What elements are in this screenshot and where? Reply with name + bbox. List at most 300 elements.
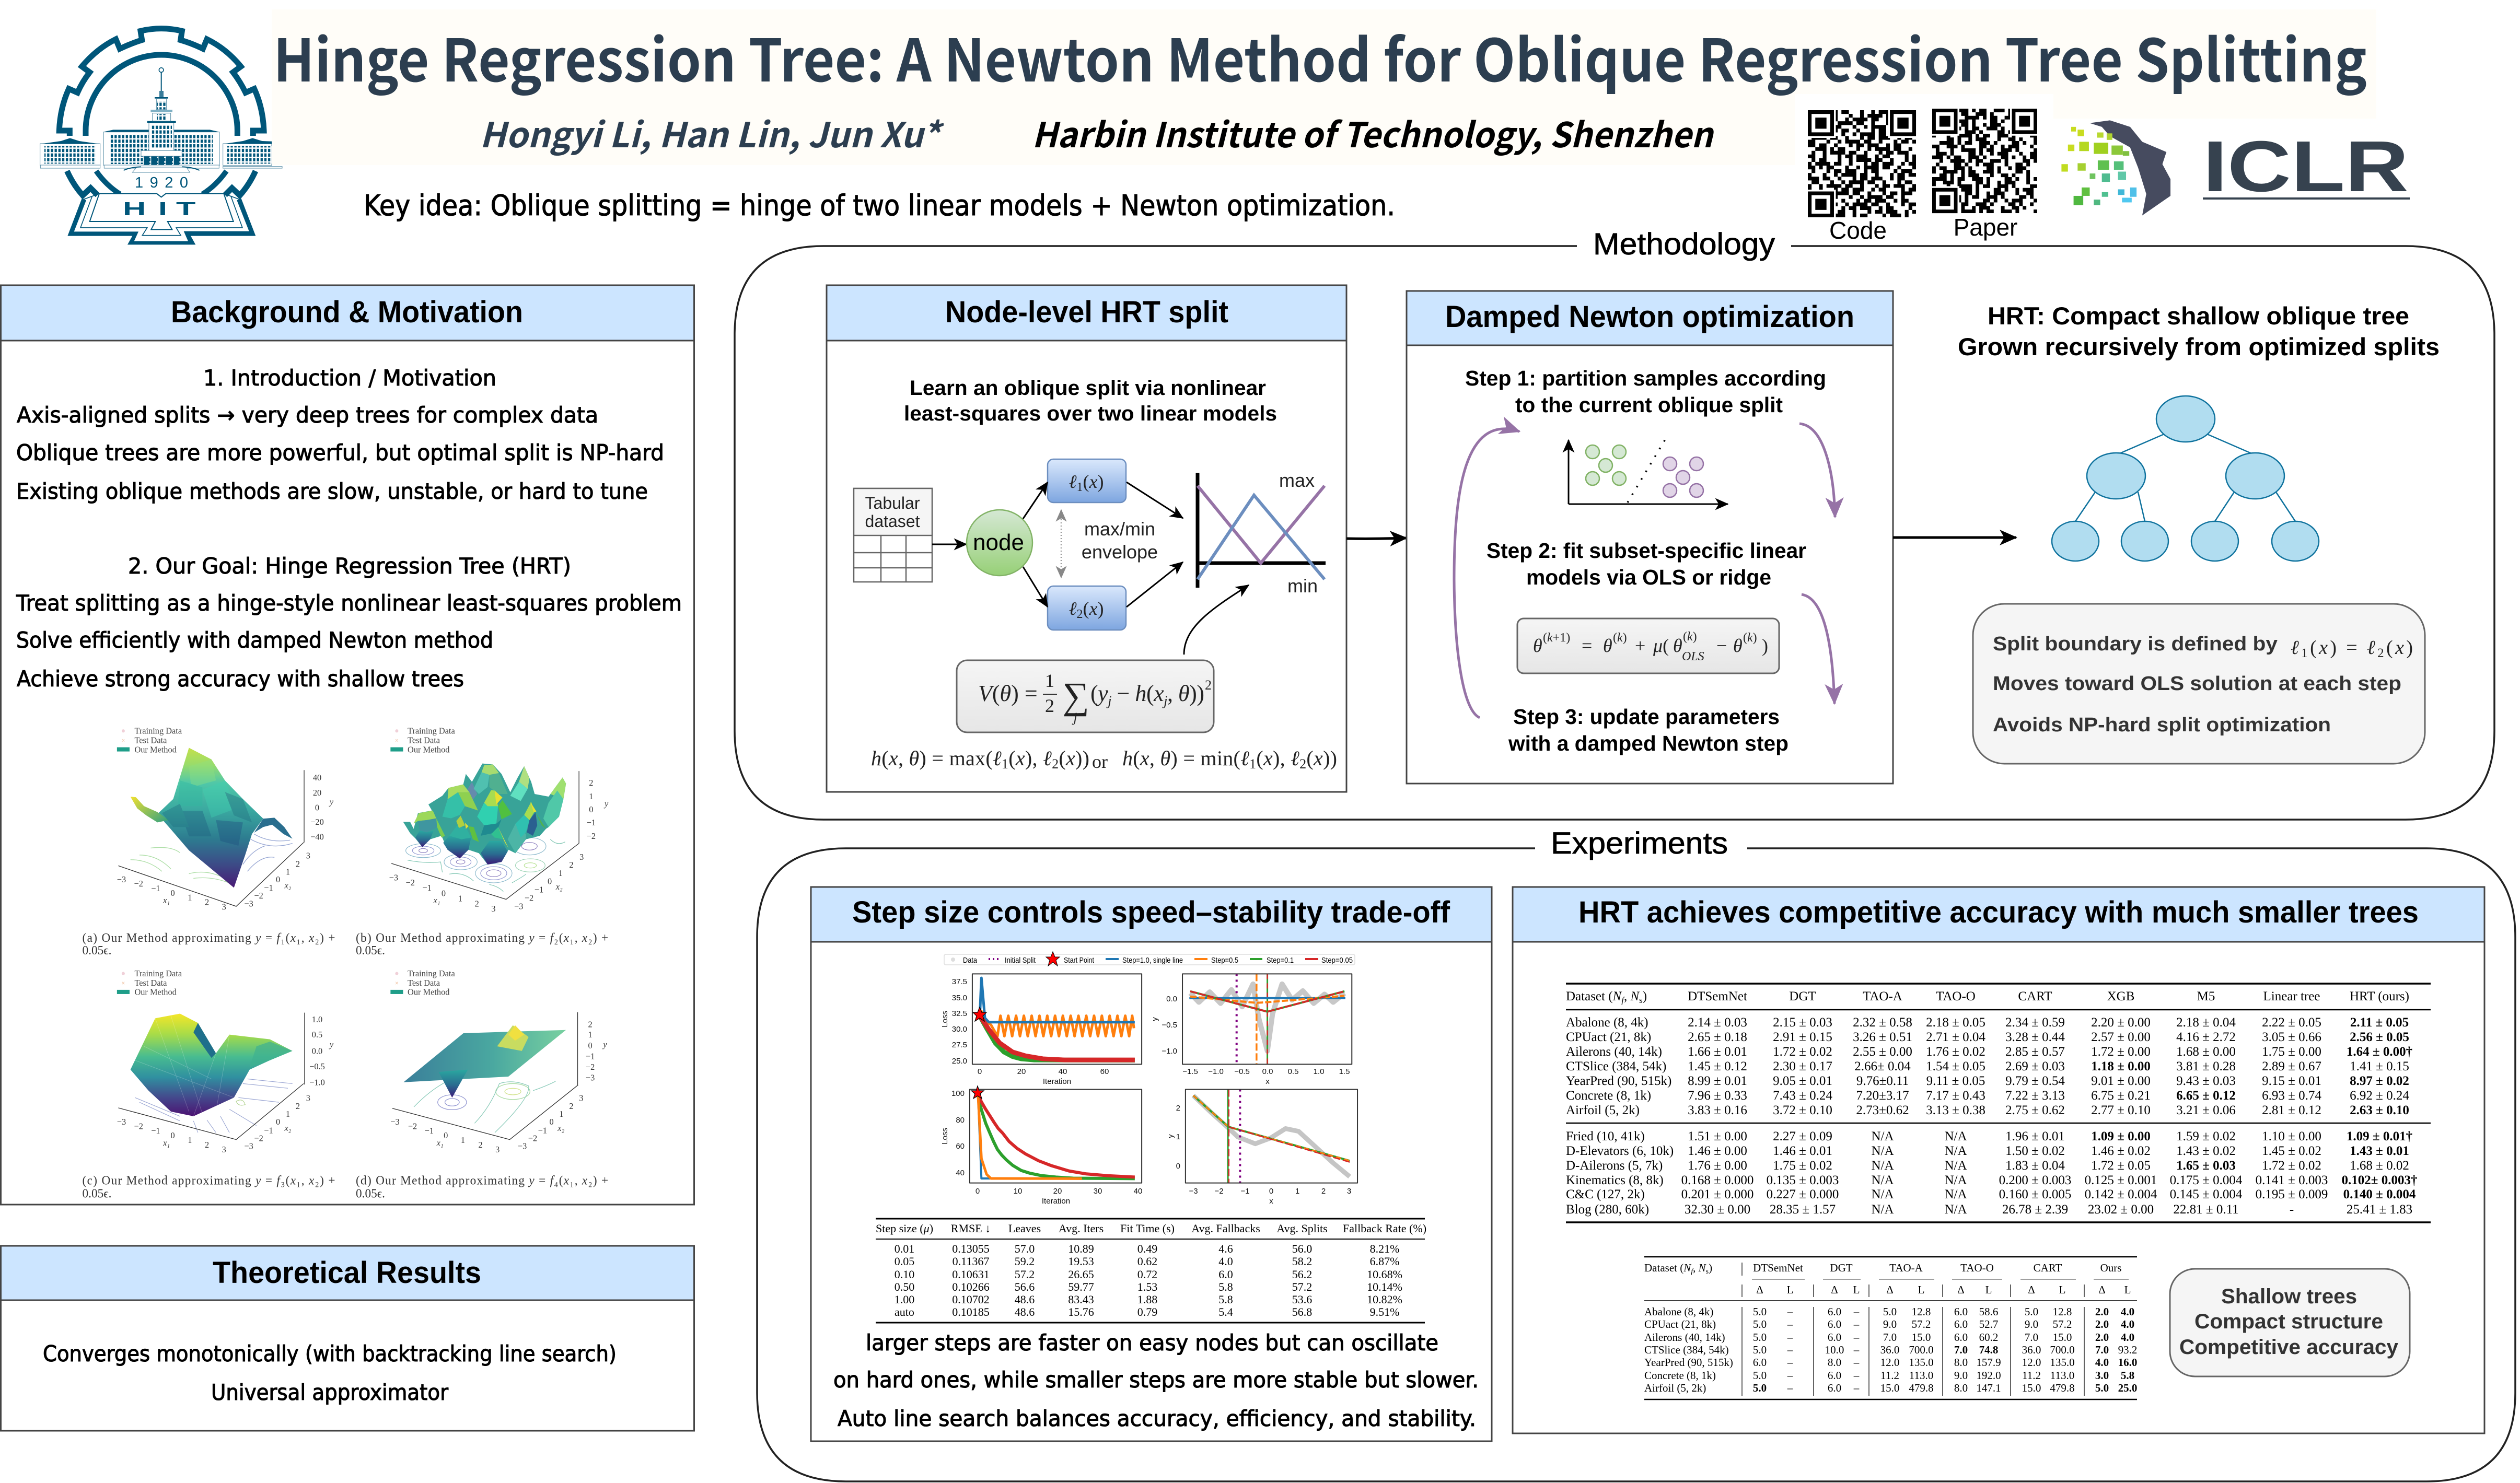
table: accuracy by dataset: 1.59 ± 0.02 [2176,1129,2236,1143]
table: tree depth and leaves: 57.2 [1912,1318,1931,1330]
table: accuracy by dataset: 0.141 ± 0.003 [2256,1173,2328,1187]
table: tree depth and leaves: 8.0 [1828,1356,1841,1369]
table: accuracy by dataset: 2.22 ± 0.05 [2262,1015,2321,1030]
table: tree depth and leaves: 6.0 [1753,1356,1767,1369]
box: linear model one: 1 [1077,481,1083,494]
surface plot a: 20 [313,787,321,798]
table: step size results: Avg. Splits [1276,1222,1328,1235]
table: step size results: 19.53 [1068,1255,1094,1268]
authors: Hongyi Li, Han Lin, Jun Xu* [480,108,944,158]
table: step size results: 48.6 [1015,1293,1035,1306]
label: max min envelope: envelope [1082,541,1158,563]
section: introduction text: Axis-aligned splits → very deep trees for complex data [17,402,598,428]
table: tree depth and leaves: 5.0 [1753,1331,1767,1344]
table: accuracy by dataset: CPUact (21, 8k) [1566,1030,1651,1044]
chart: split fit bottom: 2 [1321,1187,1326,1196]
surface plot d: 1 [461,1135,465,1145]
surface plot b: −1 [535,884,543,895]
table: tree depth and leaves: Δ [1957,1283,1965,1296]
chart: hinge lines [1198,470,1326,597]
table: accuracy by dataset: 0.195 ± 0.009 [2256,1187,2328,1201]
table: accuracy by dataset: 1.46 ± 0.01 [1773,1144,1832,1158]
surface plot d: −2 [528,1133,537,1143]
diagram: oblique tree [2052,396,2319,561]
surface plot d: Test Data [408,978,440,988]
table: accuracy by dataset: 1.09 ± 0.00 [2091,1129,2151,1143]
table: step size results: 10.89 [1068,1242,1094,1255]
text: step two [1487,539,1806,589]
table: step size results: 56.6 [1015,1280,1035,1293]
surface plot a: −20 [310,817,324,827]
chart: split fit bottom: −1 [1240,1187,1250,1196]
arrows: node to models to plot [1023,482,1183,607]
chart: split fit bottom: −2 [1214,1187,1224,1196]
table: tree depth and leaves: Δ [2028,1283,2035,1296]
table: tree depth and leaves: 15.0 [2053,1331,2072,1344]
table: accuracy by dataset: ) [1643,989,1647,1003]
table: step size results: 6.87% [1370,1255,1399,1268]
surface plot d: 0 [444,1130,448,1140]
table: accuracy by dataset: 28.35 ± 1.57 [1770,1202,1836,1217]
surface plot c: −3 [244,1141,253,1151]
formula box: newton update: + [1635,635,1645,656]
table: tree depth and leaves: 9.0 [2025,1318,2038,1330]
table: accuracy by dataset: 1.72 ± 0.02 [1773,1045,1832,1059]
formula box: newton update: θ [1603,635,1612,656]
chart: loss curves top: 32.5 [952,1009,967,1018]
table: step size results: 4.0 [1218,1255,1233,1268]
table: tree depth and leaves: 15.0 [2022,1382,2041,1394]
table: accuracy by dataset: 6.92 ± 0.24 [2350,1089,2409,1103]
table: step size results: 56.0 [1292,1242,1312,1255]
chart: split fit top: 0.0 [1166,995,1177,1003]
surface plot b [356,726,609,957]
table: accuracy by dataset: 1.66 ± 0.01 [1688,1045,1747,1059]
surface plot b: −2 [406,878,415,888]
table: tree depth and leaves: 113.0 [1909,1369,1933,1382]
table: accuracy by dataset: 2.71 ± 0.04 [1926,1030,1985,1044]
table: tree depth and leaves: 9.0 [1883,1318,1897,1330]
surface plot b: −3 [514,901,523,912]
table: accuracy by dataset: 8.97 ± 0.02 [2350,1074,2409,1088]
table: accuracy by dataset: N/A [1871,1202,1894,1217]
table: accuracy by dataset: 3.21 ± 0.06 [2176,1103,2236,1117]
table: tree depth and leaves: 5.0 [1753,1318,1767,1330]
formula box: objective V: ∑ [1062,675,1089,717]
table: accuracy by dataset: - [2290,1202,2294,1217]
formula: hinge max or min: ( [1306,746,1314,770]
surface plot c: x₁ [162,1138,170,1148]
chart: loss curves top: 20 [1017,1067,1026,1076]
formula: hinge max or min: or [1092,751,1108,772]
table: accuracy by dataset: 2.69 ± 0.03 [2005,1059,2065,1073]
surface plot b: 0 [442,888,446,898]
surface plot a: Our Method [134,744,177,754]
table: accuracy by dataset: 1.09 ± 0.01† [2347,1129,2412,1143]
table: step size results: Avg. Fallbacks [1191,1222,1260,1235]
emblem year: 1920 [135,174,188,191]
table: tree depth and leaves: 11.2 [1880,1369,1899,1382]
chart: split fit top: 0.5 [1288,1067,1298,1076]
table: tree depth and leaves [1644,1257,2137,1399]
surface plot c: x₂ [284,1123,292,1133]
table: accuracy by dataset: N/A [1871,1159,1894,1173]
surface plot b: −2 [587,831,596,841]
surface plot a: −40 [310,832,324,842]
callout: split boundary notes: Avoids NP-hard split optimization [1993,714,2331,736]
formula: hinge max or min: x)) [1314,746,1337,770]
table: step size results: 83.43 [1068,1293,1094,1306]
table: accuracy by dataset: 7.17 ± 0.43 [1926,1089,1985,1103]
formula: hinge max or min: 2 [1299,756,1306,772]
table: accuracy by dataset: 1.45 ± 0.12 [1688,1059,1747,1073]
table: step size results: 59.77 [1068,1280,1094,1293]
text: step two: Step 2: fit subset-specific linear [1487,539,1806,563]
heading: background and motivation: Background & Motivation [171,295,523,329]
box: linear model two: x) [1089,598,1104,619]
box: linear model one: ( [1083,471,1089,492]
table: tree depth and leaves: – [1853,1318,1860,1330]
callout: split boundary notes: Moves toward OLS solution at each step [1993,673,2401,695]
table: accuracy by dataset: 2.81 ± 0.12 [2262,1103,2321,1117]
formula box: newton update: (k) [1613,631,1627,645]
table: accuracy by dataset: 2.34 ± 0.59 [2005,1015,2065,1030]
formula box: objective V: , [1167,681,1178,706]
table: tree depth and leaves: – [1787,1369,1793,1382]
surface plot c: −3 [117,1117,126,1127]
table: accuracy by dataset: 1.72 ± 0.00 [2091,1045,2151,1059]
heading: node-level split: Node-level HRT split [945,295,1228,329]
formula: hinge max or min: x), ℓ [1016,746,1052,770]
panel: background and motivation [1,285,694,1205]
table: tree depth and leaves: – [1787,1305,1793,1318]
text: step three: with a damped Newton step [1508,731,1789,755]
table: accuracy by dataset: 2.65 ± 0.18 [1688,1030,1747,1044]
surface plot a: 2 [296,859,300,869]
surface plot a: Training Data [134,726,182,736]
chart: loss curves top: Iteration [1043,1077,1071,1086]
table: accuracy by dataset: 1.41 ± 0.15 [2350,1059,2409,1073]
surface plot b: × [395,738,399,744]
panel: methodology frame [735,227,2494,820]
formula box: newton update: = [1582,635,1592,656]
table: step size results: 6.0 [1218,1268,1233,1281]
callout: split boundary notes [1973,604,2425,764]
formula: hinge max or min [871,746,1337,772]
table: accuracy by dataset: 9.76±0.11 [1856,1074,1909,1088]
table: accuracy by dataset: N/A [1944,1187,1967,1201]
QR code: code [1808,110,1917,217]
box: linear model two: 2 [1077,608,1083,621]
table: accuracy by dataset: 2.27 ± 0.09 [1773,1129,1832,1143]
table: accuracy by dataset: Dataset (N [1566,989,1621,1003]
table: accuracy by dataset: 6.93 ± 0.74 [2262,1089,2321,1103]
surface plot a: × [122,738,125,744]
panel: theoretical results [1,1246,694,1431]
table: accuracy by dataset: CTSlice (384, 54k) [1566,1059,1666,1073]
table: tabular dataset [854,488,932,582]
formula: hinge max or min: h(x, θ) = max(ℓ [871,746,1002,770]
table: tree depth and leaves: 58.6 [1979,1305,1998,1318]
table: tree depth and leaves: Δ [1756,1283,1763,1296]
table: accuracy by dataset: Linear tree [2263,989,2320,1003]
text: step size takeaway: larger steps are faster on easy nodes but can oscillate [866,1330,1438,1356]
surface plot c [83,968,335,1200]
surface plot b: 0 [548,876,552,886]
surface plot d: 1 [559,1109,564,1119]
table: tree depth and leaves: 12.0 [1880,1356,1899,1369]
surface plot a: 3 [222,902,226,912]
surface plot b: y [603,799,609,809]
section: goal text: 2. Our Goal: Hinge Regression Tree (HRT) [128,553,571,579]
table: accuracy by dataset: 2.18 ± 0.05 [1926,1015,1985,1030]
table: tree depth and leaves: N [1698,1262,1706,1274]
table: accuracy by dataset: D-Ailerons (5, 7k) [1566,1159,1663,1173]
callout: split boundary notes: ( [2310,637,2317,659]
table: accuracy by dataset: XGB [2107,989,2134,1003]
table: step size results: 57.2 [1292,1280,1312,1293]
table: step size results: 0.11367 [953,1255,989,1268]
table: accuracy by dataset: 3.83 ± 0.16 [1688,1103,1747,1117]
table: accuracy by dataset: 2.20 ± 0.00 [2091,1015,2151,1030]
table: accuracy by dataset: 7.22 ± 3.13 [2005,1089,2065,1103]
heading: competitive accuracy: HRT achieves competitive accuracy with much smaller trees [1578,895,2419,929]
table: accuracy by dataset: 2.66± 0.04 [1854,1059,1911,1073]
table: accuracy by dataset: 26.78 ± 2.39 [2002,1202,2068,1217]
table: tree depth and leaves: 5.0 [1883,1305,1897,1318]
surface plot a: 40 [313,773,321,783]
table: accuracy by dataset: 1.76 ± 0.02 [1926,1045,1985,1059]
text: step one [1465,366,1826,417]
table: tree depth and leaves: 6.0 [1954,1331,1968,1344]
table: accuracy by dataset: 0.168 ± 0.000 [1681,1173,1753,1187]
table: tree depth and leaves: 5.0 [1753,1305,1767,1318]
box: linear model two [1048,586,1126,630]
surface plot c: 3 [222,1145,226,1154]
table: tree depth and leaves: DGT [1830,1262,1853,1274]
box: linear model two: ℓ [1069,598,1077,619]
arrow: split panel to newton panel [1346,538,1407,539]
surface plot b: x₂ [555,882,563,892]
heading: methodology: Methodology [1593,227,1775,261]
table: step size results: 0.62 [1137,1255,1157,1268]
chart legend: Initial Split [1005,956,1036,965]
table: tree depth and leaves: 5.0 [2025,1305,2038,1318]
table: tree depth and leaves: 6.0 [1828,1331,1841,1344]
table: accuracy by dataset: N/A [1944,1144,1967,1158]
table: tree depth and leaves: L [1853,1283,1860,1296]
table: tree depth and leaves: CART [2034,1262,2062,1274]
surface plot c: −2 [134,1121,143,1131]
table: accuracy by dataset: 0.135 ± 0.003 [1767,1173,1839,1187]
table: accuracy by dataset: N/A [1871,1187,1894,1201]
table: tree depth and leaves: Ours [2100,1262,2121,1274]
table: tree depth and leaves: 74.8 [1979,1344,1998,1356]
surface plot d: 3 [579,1093,583,1103]
table: step size results: Fit Time (s) [1120,1222,1175,1235]
callout: shallow trees [2170,1269,2410,1376]
table: accuracy by dataset: 0.175 ± 0.004 [2170,1173,2243,1187]
surface plot a: x₁ [162,895,170,905]
surface plot d: 3 [495,1145,500,1154]
table: tabular dataset: dataset [865,512,920,531]
table: accuracy by dataset: 2.89 ± 0.67 [2262,1059,2321,1073]
label: max min envelope [1082,518,1158,563]
table: accuracy by dataset: 2.32 ± 0.58 [1853,1015,1912,1030]
chart: loss curves bottom: 30 [1094,1187,1102,1196]
ICLR wordmark: ICLR [2203,126,2409,207]
table: tree depth and leaves: s [1706,1268,1709,1276]
heading: compact tree [1958,302,2440,360]
table: step size results: 0.49 [1137,1242,1157,1255]
surface plot d: 0 [549,1117,554,1127]
surface plot b: −1 [422,883,432,893]
table: step size results: 0.01 [895,1242,914,1255]
surface plot b: −1 [587,818,596,827]
chart: loss curves bottom: 60 [956,1142,965,1151]
table: accuracy by dataset: 1.76 ± 0.00 [1688,1159,1747,1173]
arrow: newton panel to tree [1893,536,2016,539]
surface plot b: 3 [491,904,496,914]
table: tree depth and leaves: 25.0 [2118,1382,2137,1394]
surface plot c: 2 [296,1101,300,1111]
table: tree depth and leaves: L [2124,1283,2131,1296]
text: step one: Step 1: partition samples according [1465,366,1826,390]
table: accuracy by dataset: 9.05 ± 0.01 [1773,1074,1832,1088]
formula box: newton update: − [1716,635,1727,656]
text: approximator result: Universal approximator [211,1380,449,1405]
table: accuracy by dataset: 1.68 ± 0.02 [2350,1159,2409,1173]
surface plot d: −3 [390,1117,400,1127]
surface plot d: x₂ [557,1123,564,1133]
callout: shallow trees: Competitive accuracy [2179,1336,2399,1359]
surface plot a: x₂ [284,880,292,891]
table: accuracy by dataset: 0.201 ± 0.000 [1681,1187,1753,1201]
table: tree depth and leaves: 2.0 [2095,1318,2109,1330]
section: goal text: Solve efficiently with damped Newton method [16,627,493,653]
table: accuracy by dataset: C&C (127, 2k) [1566,1187,1645,1201]
table: step size results: 5.8 [1218,1293,1233,1306]
table: accuracy by dataset: 4.16 ± 2.72 [2176,1030,2236,1044]
table: tree depth and leaves: 6.0 [1828,1318,1841,1330]
table: accuracy by dataset: 3.13 ± 0.38 [1926,1103,1985,1117]
table: step size results: Step size (μ) [876,1222,933,1235]
formula box: newton update: (k) [1743,631,1757,645]
table: tree depth and leaves: 52.7 [1979,1318,1998,1330]
surface plot d: −2 [586,1062,595,1072]
chart: loss curves bottom: 40 [956,1169,965,1177]
formula box: newton update: θ [1733,635,1743,656]
formula box: newton update: (k+1) [1543,631,1570,645]
table: accuracy by dataset: 23.02 ± 0.00 [2088,1202,2154,1217]
formula box: objective V: h(x [1135,681,1164,706]
caption b: (b) Our Method approximating y = f₂(x₁, x₂) + [356,931,608,945]
table: step size results [876,1219,1426,1323]
surface plot a: 1 [286,867,290,877]
formula box: objective V: 1 [1045,670,1054,691]
chart legend: Step=0.1 [1267,956,1294,965]
table: tree depth and leaves: 15.0 [1912,1331,1931,1344]
chart: split fit top: 1.0 [1314,1067,1324,1076]
surface plot c: Our Method [134,987,177,997]
table: accuracy by dataset: 1.72 ± 0.05 [2091,1159,2151,1173]
table: accuracy by dataset: 0.227 ± 0.000 [1767,1187,1839,1201]
chart: split fit bottom: 1 [1176,1132,1180,1141]
table: step size results: 0.10266 [952,1280,990,1293]
table: step size results: 10.68% [1367,1268,1402,1281]
table: tree depth and leaves: 157.9 [1976,1356,2001,1369]
chart: hinge lines: min [1287,575,1318,597]
table: step size results: 57.0 [1015,1242,1035,1255]
table: accuracy by dataset: N/A [1944,1202,1967,1217]
QR code: paper [1932,109,2037,213]
table: tree depth and leaves: 700.0 [1909,1344,1934,1356]
formula: hinge max or min: ( [1008,746,1016,770]
table: tree depth and leaves: 3.0 [2095,1369,2109,1382]
table: tree depth and leaves: 5.0 [1753,1382,1767,1394]
table: tree depth and leaves: 5.0 [2095,1382,2109,1394]
table: accuracy by dataset: 7.43 ± 0.24 [1773,1089,1832,1103]
surface plot a: −2 [134,879,143,889]
chart: split fit bottom: 0 [1176,1162,1180,1171]
heading: step size: Step size controls speed–stability trade-off [852,895,1450,929]
callout: split boundary notes: ( [2386,637,2393,659]
formula: hinge max or min: 1 [1002,756,1008,772]
table: step size results: RMSE ↓ [951,1222,991,1235]
formula box: objective V: j [1106,693,1111,708]
chart: split fit top: −0.5 [1162,1021,1177,1030]
surface plot d: 1 [588,1030,593,1040]
table: accuracy by dataset: 2.15 ± 0.03 [1773,1015,1832,1030]
panel: step size trade-off [811,887,1492,1441]
table: tree depth and leaves: – [1853,1356,1860,1369]
callout: shallow trees: Compact structure [2194,1310,2383,1333]
surface plot b: Test Data [408,735,440,745]
table: tree depth and leaves: Δ [1831,1283,1838,1296]
chart: loss curves top [940,974,1142,1086]
chart: loss curves top: 25.0 [952,1057,967,1066]
surface plot c: −1 [264,1125,273,1135]
surface plot c: 0 [171,1130,175,1140]
surface plot b: −3 [389,872,398,882]
table: tree depth and leaves: 8.0 [1954,1356,1968,1369]
chart: loss curves bottom [940,1086,1142,1206]
table: accuracy by dataset: 1.75 ± 0.02 [1773,1159,1832,1173]
table: accuracy by dataset: 3.72 ± 0.10 [1773,1103,1832,1117]
table: step size results: 10.14% [1367,1280,1402,1293]
table: accuracy by dataset: 9.01 ± 0.00 [2091,1074,2151,1088]
chart: split fit top: y [1151,1017,1159,1021]
table: accuracy by dataset: 1.43 ± 0.01 [2350,1144,2409,1158]
table: tree depth and leaves: 60.2 [1979,1331,1998,1344]
formula box: newton update: (k) [1683,630,1697,644]
table: step size results: 0.10631 [952,1268,990,1281]
table: tree depth and leaves: 4.0 [2121,1305,2134,1318]
chart: split fit bottom: 3 [1347,1187,1351,1196]
table: accuracy by dataset: N/A [1871,1129,1894,1143]
section: introduction text: Oblique trees are more powerful, but optimal split is NP-hard [16,440,664,465]
chart: loss curves top: 60 [1100,1067,1109,1076]
chart: loss curves bottom: 10 [1014,1187,1022,1196]
arrows: purple iteration cycle [1454,424,1835,718]
table: tree depth and leaves: – [1787,1382,1793,1394]
table: accuracy by dataset: Airfoil (5, 2k) [1566,1103,1640,1117]
table: accuracy by dataset: 2.75 ± 0.62 [2005,1103,2065,1117]
table: tree depth and leaves: 4.0 [2121,1331,2134,1344]
formula: hinge max or min: h(x, θ) = min(ℓ [1122,746,1249,770]
panel: damped newton optimization [1407,291,1893,784]
callout: split boundary notes: 1 [2301,646,2308,660]
